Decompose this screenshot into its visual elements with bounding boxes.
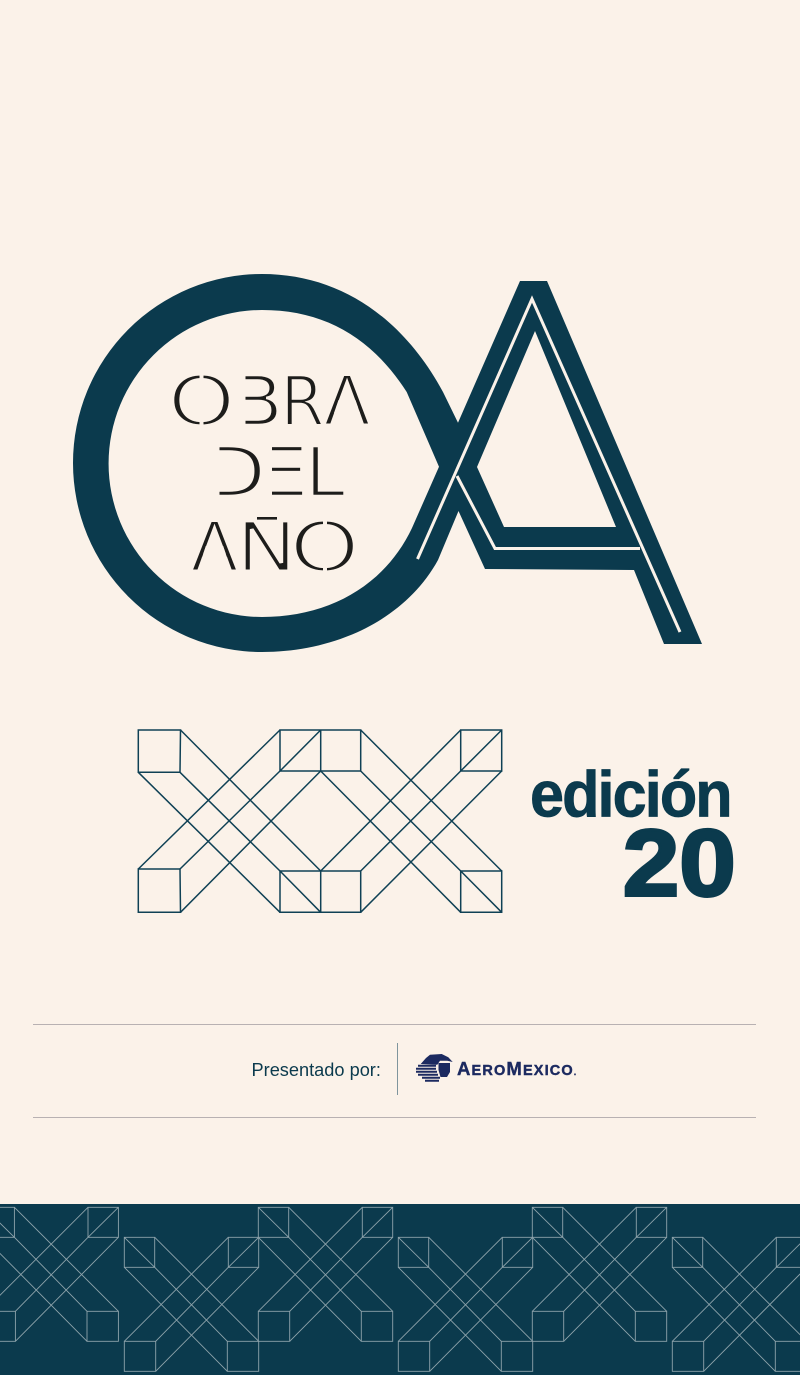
heading: edición: edición [530,759,731,831]
pattern lower row [124,1237,800,1371]
sponsor strip [33,1024,756,1118]
icon: XX outline roman numeral [138,730,502,912]
divider top [33,1024,756,1025]
word: DEL [204,432,345,513]
divider bottom [33,1117,756,1118]
word: OBRA: A [324,362,371,442]
logo: OA monogram [73,274,702,652]
monogram inline stroke [418,299,680,632]
word: AÑO: Ñ [236,507,297,587]
icon: Aeromexico eagle [416,1054,453,1082]
word: OBRA: O [168,363,235,442]
word: OBRA: B [231,361,283,441]
word: AÑO: O [289,507,360,587]
word: AÑO [191,499,360,588]
band background [0,1204,800,1375]
heading: 20: 20 [623,810,736,916]
footer band with X pattern [0,1204,800,1375]
word: OBRA [168,361,371,442]
text: presented by: Presentado por: [252,1060,381,1080]
logo text: OBRA DEL AÑO [168,361,371,588]
word: DEL: D [204,432,266,512]
word: DEL: L [305,433,345,513]
word: DEL: E [257,433,309,512]
monogram shape [73,274,702,652]
word: AÑO: A [191,509,238,588]
word: OBRA: R [280,362,325,442]
vertical divider [397,1043,398,1095]
logo text: Aeromexico: AEROMEXICO. [457,1058,577,1079]
pattern upper row [0,1207,667,1341]
